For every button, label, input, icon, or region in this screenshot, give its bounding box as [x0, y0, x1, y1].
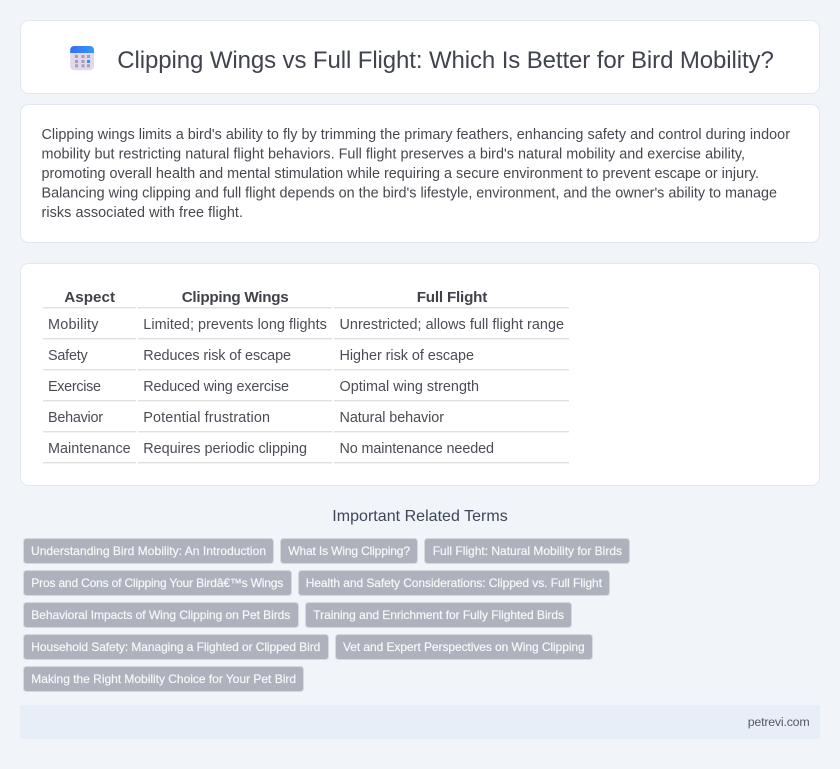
row: exercise — [48, 379, 479, 395]
footer — [20, 705, 820, 739]
title: Clipping Wings vs Full Flight: Which Is Better for Bird Mobility? — [117, 47, 774, 74]
panel: title header — [20, 20, 820, 94]
summary text: risks associated with free flight. — [42, 205, 243, 221]
chip — [306, 602, 572, 628]
row: maintenance: Maintenance — [48, 441, 131, 457]
row: safety: Reduces risk of escape — [143, 348, 291, 364]
chip — [280, 538, 418, 564]
chip: Behavioral Impacts of Wing Clipping on Pet Birds — [31, 608, 290, 622]
summary text: Clipping wings limits a bird's ability to fly by trimming the primary feathers, enhancing safety and control during indoor — [42, 127, 790, 143]
row: exercise: Exercise — [48, 379, 101, 395]
panel: related term chips — [24, 538, 630, 692]
row: mobility: Mobility — [48, 317, 99, 333]
chip — [24, 570, 292, 596]
chip — [24, 666, 304, 692]
row: safety: Safety — [48, 348, 88, 364]
chip: What Is Wing Clipping? — [288, 544, 410, 558]
row: maintenance: No maintenance needed — [340, 441, 494, 457]
row: mobility: Unrestricted; allows full flight range — [340, 317, 564, 333]
row: mobility: Limited; prevents long flights — [143, 317, 327, 333]
table header: Full Flight — [417, 289, 487, 306]
row: maintenance — [48, 441, 494, 457]
summary text: mobility but restricting natural flight behaviors. Full flight preserves a bird's natural mobility and exercise ability, — [42, 146, 745, 162]
row: behavior: Natural behavior — [340, 410, 444, 426]
chip: Training and Enrichment for Fully Flighted Birds — [313, 608, 564, 622]
row: exercise: Optimal wing strength — [340, 379, 479, 395]
chip: Vet and Expert Perspectives on Wing Clipping — [343, 640, 585, 654]
panel: summary — [20, 104, 820, 242]
icon: calendar — [70, 46, 94, 70]
chip — [24, 538, 274, 564]
chip: Pros and Cons of Clipping Your Birdâ€™s Wings — [31, 576, 283, 590]
row: exercise: Reduced wing exercise — [143, 379, 289, 395]
row: behavior: Potential frustration — [143, 410, 270, 426]
row: behavior: Behavior — [48, 410, 103, 426]
chip: Full Flight: Natural Mobility for Birds — [433, 544, 622, 558]
chip — [298, 570, 610, 596]
table header: Clipping Wings — [182, 289, 289, 306]
row: safety: Higher risk of escape — [340, 348, 474, 364]
panel: comparison table — [20, 264, 820, 486]
chip: Making the Right Mobility Choice for Your Pet Bird — [31, 672, 296, 686]
chip — [424, 538, 630, 564]
footer source: petrevi.com — [748, 715, 810, 729]
chip: Understanding Bird Mobility: An Introduction — [31, 544, 266, 558]
chip: Health and Safety Considerations: Clipped vs. Full Flight — [306, 576, 603, 590]
summary text: promoting overall health and mental stimulation while requiring a secure environment to prevent escape or injury. — [42, 166, 759, 182]
row: mobility — [48, 317, 564, 333]
chip — [24, 634, 328, 660]
table header: Aspect — [64, 289, 115, 306]
chip: Household Safety: Managing a Flighted or Clipped Bird — [31, 640, 320, 654]
chip — [336, 634, 592, 660]
summary text: Balancing wing clipping and full flight depends on the bird's lifestyle, environment, and the owner's ability to manage — [42, 186, 777, 202]
row: safety — [48, 348, 474, 364]
table header — [64, 289, 487, 306]
chip — [24, 602, 298, 628]
summary text — [42, 127, 790, 221]
row: behavior — [48, 410, 444, 426]
row: maintenance: Requires periodic clipping — [143, 441, 307, 457]
heading: important related terms: Important Related Terms — [332, 508, 508, 525]
